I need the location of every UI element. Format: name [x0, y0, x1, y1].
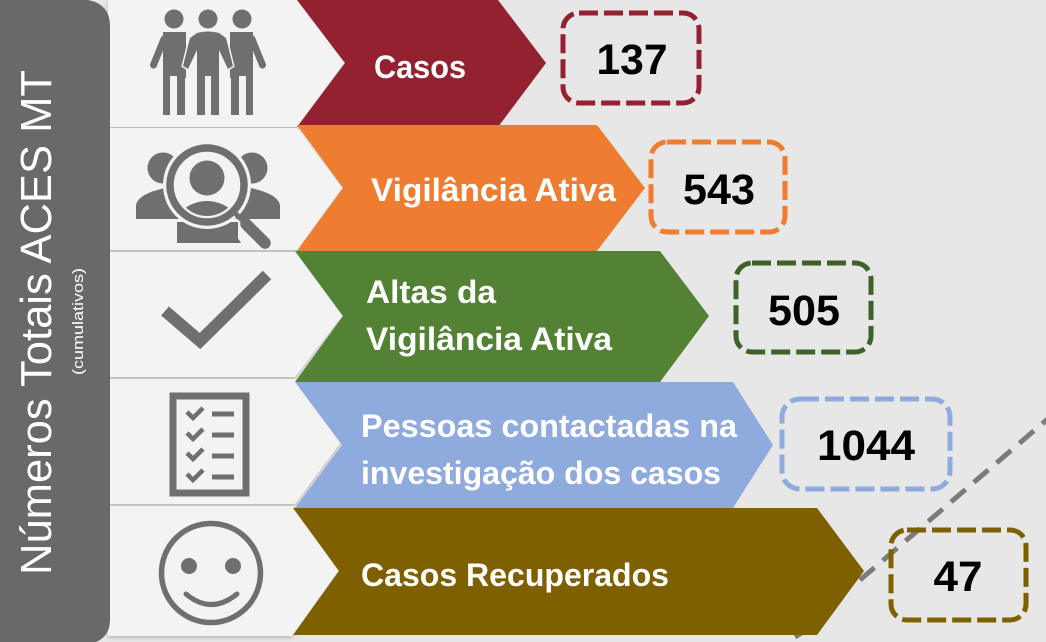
arrow: Altas da Vigilância Ativa: Altas da	[366, 274, 496, 310]
value box: 47	[891, 530, 1026, 620]
arrow: Altas da Vigilância Ativa	[295, 251, 709, 382]
icon: person search	[136, 141, 280, 243]
arrow: Casos Recuperados: Casos Recuperados	[361, 557, 669, 593]
value box: 543	[651, 142, 785, 232]
value box: 505: 505	[768, 287, 840, 335]
value box: 137	[563, 13, 699, 103]
arrow: Pessoas contactadas: investigação dos casos	[361, 455, 721, 491]
dashed diagonal line	[795, 417, 1046, 637]
arrow: Pessoas contactadas	[295, 382, 773, 508]
arrow: Casos	[297, 0, 546, 127]
arrow: Vigilância Ativa	[297, 125, 645, 251]
icon: smiley face	[162, 524, 260, 622]
icon: check mark	[165, 275, 267, 341]
value box: 137: 137	[596, 36, 668, 84]
side panel subtitle: (cumulativos)	[70, 268, 87, 375]
value box: 1044	[782, 399, 950, 489]
value box: 505	[736, 263, 871, 352]
arrow: Casos Recuperados	[293, 508, 864, 635]
icon rows background	[108, 0, 344, 636]
value box: 1044: 1044	[817, 422, 915, 470]
arrow: Pessoas contactadas: Pessoas contactadas na	[361, 408, 737, 444]
value box: 543: 543	[683, 166, 755, 214]
arrow: Vigilância Ativa: Vigilância Ativa	[371, 172, 616, 208]
arrow: Casos: Casos	[374, 49, 466, 85]
icon: checklist	[173, 396, 246, 493]
side panel title: Números Totais ACES MT	[13, 70, 61, 575]
side panel	[0, 0, 110, 642]
icon: three people	[154, 10, 262, 115]
value box: 47: 47	[934, 553, 982, 601]
arrow: Altas da Vigilância Ativa: Vigilância Ativa	[366, 321, 612, 357]
